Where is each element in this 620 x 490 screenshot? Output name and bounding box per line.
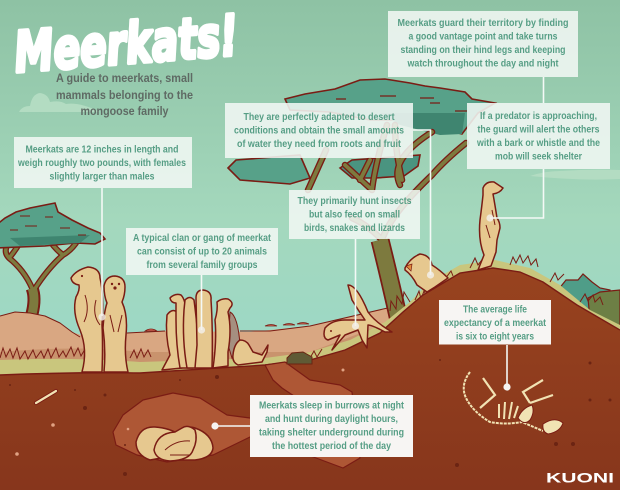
callout: size	[14, 137, 192, 188]
intro text: A guide to meerkats, small	[56, 71, 193, 85]
connector lines	[98, 77, 544, 430]
callout: desert: They are perfectly adapted to desert	[244, 111, 395, 123]
callout: burrows	[250, 395, 413, 457]
intro text: mammals belonging to the	[56, 88, 193, 102]
pelvis	[518, 405, 533, 423]
ground soil	[0, 268, 620, 490]
meerkat pair	[71, 267, 128, 372]
soil specks	[9, 359, 612, 476]
callout: predator: mob will seek shelter	[495, 150, 582, 162]
logo: Kuoni: KUONI	[546, 470, 614, 486]
callout: diet: but also feed on small	[309, 208, 400, 220]
callout: clan	[126, 228, 278, 275]
grass band	[0, 260, 620, 382]
callout: diet	[289, 190, 420, 239]
bushes	[558, 274, 620, 335]
intro text: mongoose family	[80, 104, 169, 118]
ground edge	[0, 268, 620, 375]
callout: burrows: the hottest period of the day	[272, 440, 391, 452]
callout: desert: of water they need from roots and fruit	[237, 138, 401, 150]
callout: territory: Meerkats guard their territory by finding	[398, 17, 568, 29]
callout: desert	[225, 103, 413, 158]
callout: life expectancy: The average life	[463, 304, 527, 316]
walking meerkat	[324, 285, 392, 350]
cloud left	[19, 93, 100, 112]
baby meerkat	[233, 340, 268, 365]
sleeping meerkats	[136, 426, 213, 461]
callout: size: Meerkats are 12 inches in length and	[26, 144, 178, 156]
callout: clan: A typical clan or gang of meerkat	[133, 232, 271, 244]
callout: life expectancy	[439, 300, 551, 344]
callout: life expectancy: is six to eight years	[456, 330, 534, 342]
callout: diet: They primarily hunt insects	[298, 195, 412, 207]
bone	[36, 391, 56, 403]
callout: territory: watch throughout the day and night	[407, 58, 559, 70]
burrow and tunnel	[113, 362, 360, 468]
callout: territory	[388, 11, 578, 77]
callout: predator	[467, 103, 610, 169]
callout: territory: standing on their hind legs and keeping	[400, 44, 566, 56]
callout: diet: birds, snakes and lizards	[304, 222, 405, 234]
tree canopy upper	[285, 79, 495, 134]
cloud right	[530, 170, 620, 180]
callout: burrows: taking shelter underground during	[259, 426, 404, 438]
callout: clan: from several family groups	[146, 259, 258, 271]
callout: predator: with a bark or whistle and the	[476, 137, 600, 149]
callout: burrows: and hunt during daylight hours,	[265, 413, 398, 425]
callout: desert: conditions and obtain the small amounts	[234, 124, 404, 136]
grass tufts	[0, 255, 603, 359]
guard meerkat	[478, 182, 503, 270]
tree branches and trunk	[308, 125, 466, 240]
callout: size: weigh roughly two pounds, with females	[17, 157, 186, 169]
left tree	[0, 203, 105, 314]
callout: burrows: Meerkats sleep in burrows at night	[259, 400, 404, 412]
callout: life expectancy: expectancy of a meerkat	[444, 317, 546, 329]
callout: territory: a good vantage point and take turns	[408, 30, 558, 42]
meerkat group	[162, 290, 268, 370]
meerkat eating	[405, 254, 448, 292]
callout: predator: If a predator is approaching,	[480, 110, 597, 122]
callout: size: slightly larger than males	[50, 170, 155, 182]
far banks	[0, 306, 400, 378]
tree canopy lobe right	[340, 155, 420, 178]
tree canopy lobe left	[228, 155, 310, 184]
big acacia tree	[228, 79, 495, 325]
callout: clan: can consist of up to 20 animals	[137, 246, 267, 258]
callout: predator: the guard will alert the others	[478, 124, 600, 136]
beetle	[287, 352, 312, 364]
intro text	[56, 71, 193, 118]
skeleton	[464, 372, 563, 434]
skull	[543, 420, 563, 434]
